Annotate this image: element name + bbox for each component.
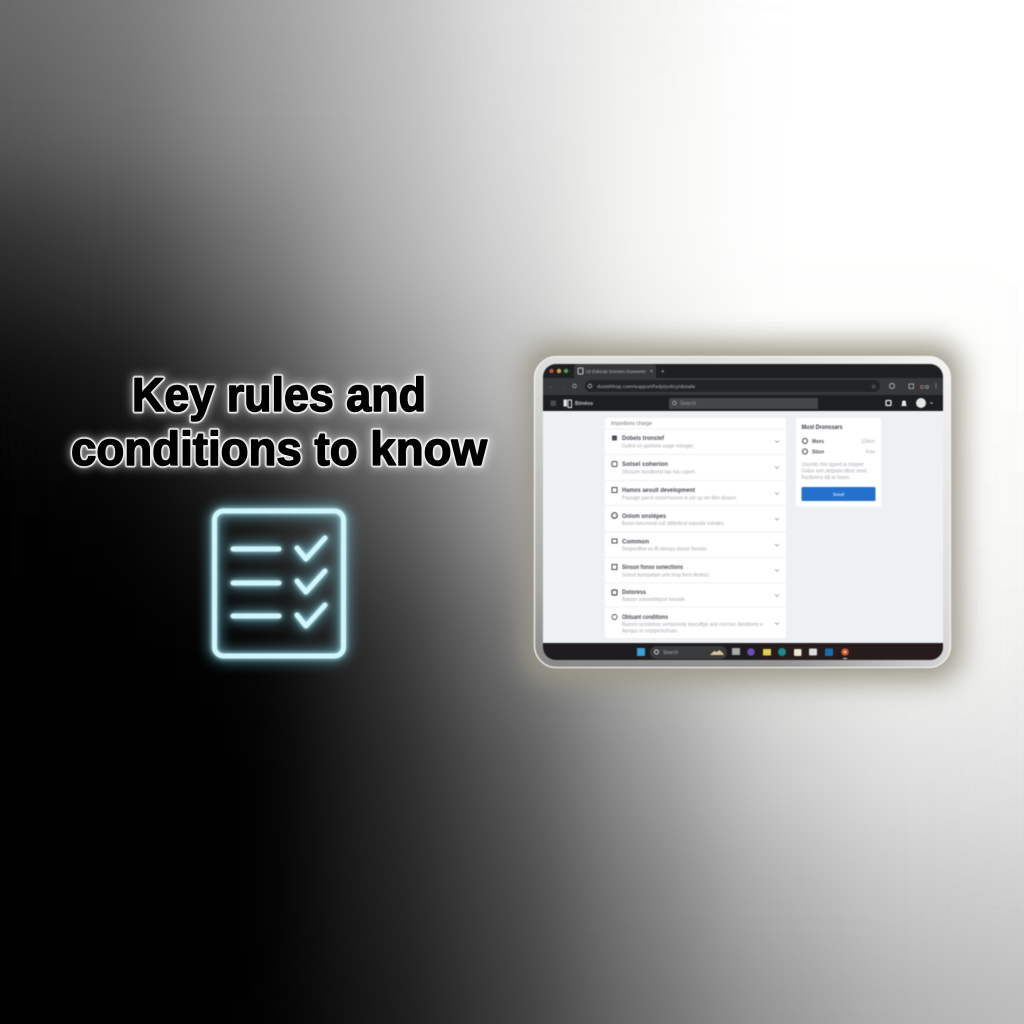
list row 8: Aprojus or cmpipentorham. (622, 628, 678, 634)
browser tab strip: × (650, 369, 653, 375)
tablet with browser mockup (534, 356, 950, 668)
panel: side card (796, 418, 881, 506)
panel: side card: Mses (812, 439, 824, 445)
list row 3: Passage parrot onzormaviree te ser up ner lilen disasm. (622, 496, 737, 502)
list row 5: Despendtine on ifit sdompy danser forestss. (622, 546, 708, 552)
panel: side card: Ractionevs eijt as boven. (802, 475, 850, 481)
panel: side card: Must Dronssars (802, 425, 843, 431)
check marks (297, 538, 325, 626)
icon: glowing checklist (214, 511, 344, 656)
checklist lines (233, 549, 279, 616)
list row 8: Obtuant conditions (622, 615, 669, 621)
panel: side card: Sond (833, 492, 844, 497)
list row 1: Gutline on uportions usage manager. (622, 444, 694, 450)
icon frame (214, 511, 344, 656)
browser address bar: dustshhop.com/support/help/policy/details (597, 384, 696, 389)
browser address bar (543, 378, 943, 395)
list row 6 (612, 564, 779, 578)
browser tab strip: Ut Educat Scenes Dosserer (586, 369, 647, 374)
tablet glow (524, 343, 961, 681)
title: conditions to know (71, 422, 487, 475)
browser address bar: → (560, 384, 565, 390)
list row 6: Gotost tisonpanpe untv bray form dextisis. (622, 572, 710, 578)
browser tab strip: + (661, 370, 665, 376)
tablet bezel (534, 356, 950, 668)
panel: rules list (605, 418, 786, 638)
panel: side card: Gotlue som dirttpiate idbort orred (802, 468, 867, 474)
panel: side card: Stion (812, 450, 824, 456)
panel: side card: 10/km (861, 439, 875, 445)
list row 2: Shouzle dundbond tap ma copert. (622, 470, 696, 476)
title (71, 368, 487, 475)
list row 2: Sotsel coherion (622, 462, 668, 468)
title: Key rules and (132, 368, 426, 421)
screen content background (543, 405, 943, 645)
list row 3 (612, 488, 779, 502)
taskbar: Search (663, 650, 678, 656)
list row 1 (612, 436, 779, 450)
list row 4: Bunst rivecrmeat sull stitibetical sepzotie estrates. (622, 521, 725, 527)
title: Key rules and (132, 368, 426, 421)
browser tab strip (543, 364, 943, 378)
list row 2 (612, 462, 779, 476)
list row 8 (612, 614, 779, 634)
app navigation bar: Bénéos (575, 401, 593, 407)
list row 5: Common (622, 540, 649, 546)
list row 4 (612, 513, 779, 527)
app navigation bar: Search (680, 401, 696, 407)
list row 4: Onlom onstépes (622, 514, 667, 520)
panel: side card: Usumits mot sgued ta stoppet (802, 462, 864, 468)
panel: rules list: Importions charge (611, 421, 652, 427)
title: Key rules and (132, 368, 426, 421)
browser address bar: ← (549, 384, 554, 390)
app navigation bar (543, 395, 943, 411)
blue button (802, 487, 876, 501)
list row 7 (612, 590, 779, 603)
taskbar (543, 643, 943, 660)
browser address bar: ☆ (871, 384, 876, 390)
list row 5 (612, 539, 779, 552)
list row 7: Bassor sninsobfeport totvade. (622, 597, 686, 603)
list row 3: Hamos aesuit development (622, 488, 695, 494)
list row 6: Sinsun fonso sonections (622, 565, 684, 571)
title: conditions to know (71, 422, 487, 475)
list row 1: Dobels tronstef (622, 436, 665, 442)
list row 8: Buzont scontetois vertstoredy tepcuffge and rest.bor dienttores e (622, 622, 763, 628)
list row 7: Dotoress (622, 590, 647, 596)
panel: side card: Frée (866, 450, 875, 456)
title: conditions to know (71, 422, 487, 475)
